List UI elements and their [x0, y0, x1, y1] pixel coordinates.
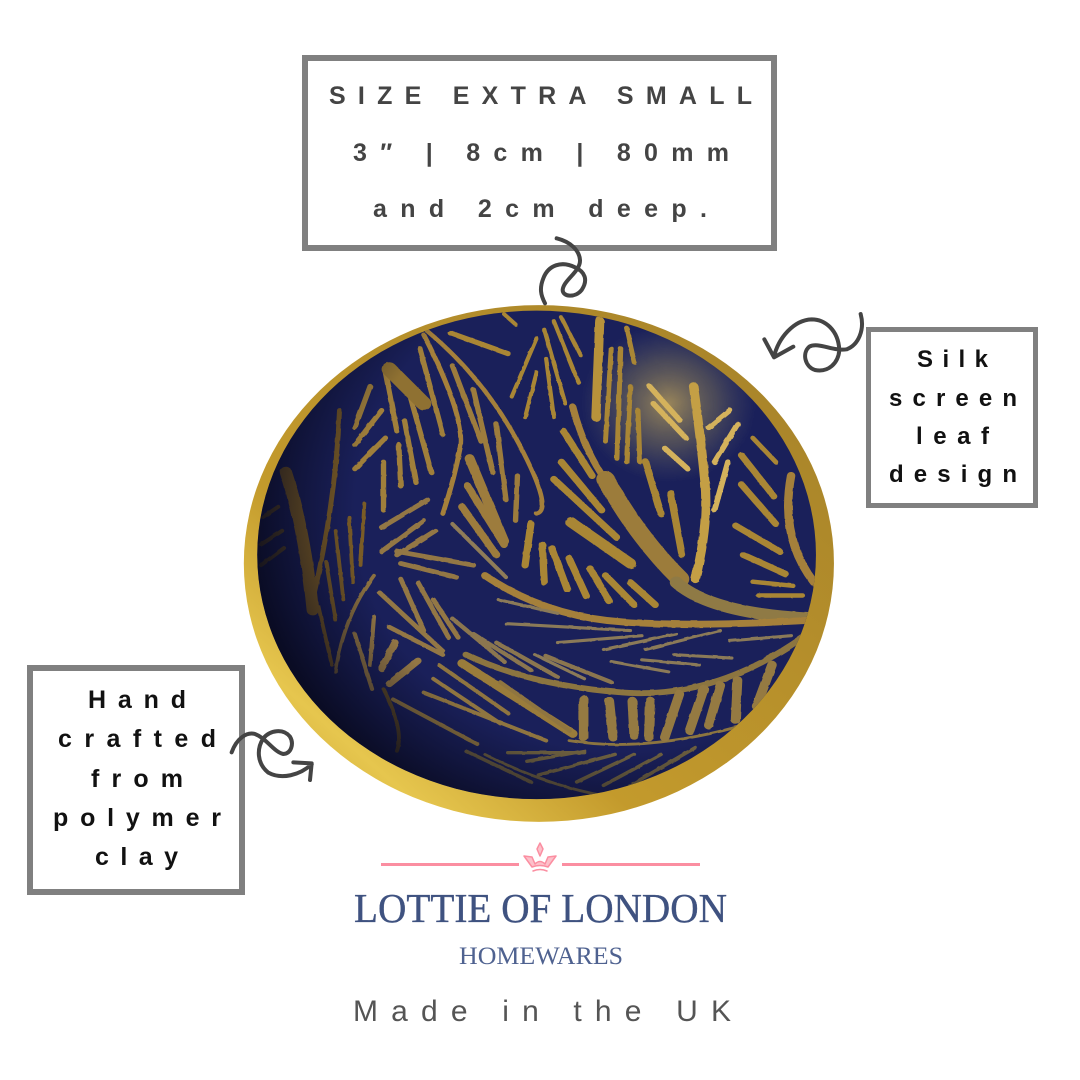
- leaves along main stem: [525, 431, 803, 605]
- text: hand crafted from polymer clay: Hand: [88, 686, 186, 714]
- text: hand crafted from polymer clay: [53, 686, 221, 871]
- heading: size extra small: SIZE EXTRA SMALL: [329, 82, 752, 110]
- logo: [354, 843, 727, 970]
- panel: silk screen callout: [868, 330, 1036, 506]
- left dark stems: [261, 410, 399, 751]
- text: silk screen leaf design: Silk: [917, 346, 989, 373]
- text: silk screen leaf design: leaf: [916, 423, 990, 450]
- arrow: top callout to bowl: [541, 238, 585, 303]
- text: silk screen leaf design: [889, 346, 1017, 488]
- tagline: Made in the UK: [353, 995, 731, 1028]
- leaf pattern: [257, 311, 816, 799]
- mid left leaves: [355, 500, 611, 689]
- panel: size callout: [305, 58, 774, 248]
- highlighted leaves: [649, 386, 738, 510]
- bowl wall shadow: [257, 330, 690, 799]
- center leaves: [452, 366, 517, 577]
- text: hand crafted from polymer clay: clay: [95, 843, 178, 871]
- icon: crown: [524, 843, 556, 871]
- panel: hand crafted callout: [30, 668, 242, 892]
- bowl gold rim: [244, 305, 834, 822]
- lower fronds: [393, 663, 695, 796]
- arrow: silk screen callout to bowl: [764, 314, 862, 370]
- arrow: hand crafted callout to bowl: [232, 731, 312, 780]
- text: silk screen leaf design: design: [889, 461, 1017, 488]
- text: hand crafted from polymer clay: polymer: [53, 804, 221, 832]
- logo divider lines: [381, 863, 700, 866]
- bowl navy interior: [257, 311, 816, 799]
- upper right sheen: [590, 334, 748, 474]
- text: silk screen leaf design: screen: [889, 385, 1017, 412]
- text: hand crafted from polymer clay: crafted: [58, 725, 216, 753]
- upper hatch leaves: [355, 314, 640, 510]
- thin middle leaves: [498, 600, 791, 679]
- bowl photo illustration: [244, 305, 834, 822]
- text: depth: and 2cm deep.: [373, 195, 707, 223]
- text: dimensions: 3″ | 8cm | 80mm: [353, 139, 729, 167]
- text: hand crafted from polymer clay: from: [91, 765, 183, 793]
- logo wordmark: LOTTIE OF LONDON: [354, 885, 727, 931]
- main stems: [424, 331, 814, 744]
- logo subtitle: HOMEWARES: [459, 943, 623, 970]
- bottom row leaves: [584, 665, 772, 737]
